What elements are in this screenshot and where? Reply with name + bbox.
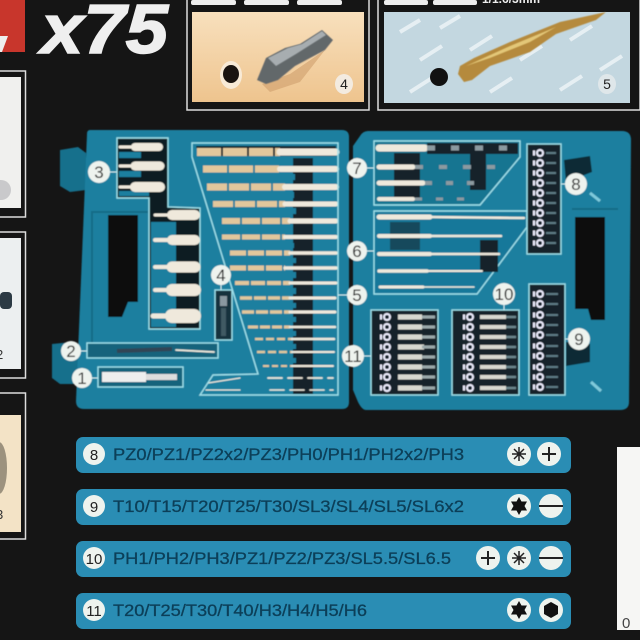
icon: torx (507, 598, 531, 622)
icon: phillips (476, 546, 500, 570)
legend bar 10: PH1/PH2/PH3/PZ1/PZ2/PZ3/SL5.5/SL6.5 (113, 549, 451, 568)
callout 5 (338, 285, 367, 305)
icon: slotted (539, 494, 563, 518)
case left half (52, 130, 349, 409)
legend bar 8 (76, 437, 571, 473)
callout 11 (342, 345, 371, 367)
callout 6: 6 (352, 242, 362, 261)
callout 2: 2 (66, 342, 76, 361)
legend bar 11: T20/T25/T30/T40/H3/H4/H5/H6 (113, 601, 367, 620)
icon: pozidriv (507, 442, 531, 466)
legend bar 8: PZ0/PZ1/PZ2x2/PZ3/PH0/PH1/PH2x2/PH3 (113, 445, 464, 464)
callout 7: 7 (352, 159, 362, 178)
box 9: bit column (529, 284, 565, 395)
callout 9 (565, 328, 590, 350)
panel: left cropped photo 2 (0, 232, 26, 378)
callout 11: 11 (344, 347, 362, 366)
callout 6 (347, 241, 374, 261)
icon: phillips (537, 442, 561, 466)
box 6: masonry drills (374, 211, 527, 294)
box 11: bit block (371, 310, 438, 395)
legend bar 9: T10/T15/T20/T25/T30/SL3/SL4/SL5/SL6x2 (113, 497, 464, 516)
panel: left cropped photo 1 (0, 71, 26, 217)
panel: gold drill photo 5: 5 (603, 76, 611, 92)
callout 4 (211, 265, 231, 290)
panel: right cropped white card (617, 447, 640, 632)
legend bar 10: 10 (86, 551, 102, 568)
box 4: countersinks (215, 290, 232, 340)
red logo fragment (0, 0, 25, 52)
legend bar 9 (76, 489, 571, 525)
legend bar 11: 11 (86, 603, 102, 620)
box 1: magnetic holder (98, 367, 183, 387)
box 8: bit column (527, 144, 561, 254)
callout 3: 3 (94, 163, 104, 182)
callout 8 (561, 173, 587, 195)
callout 1 (72, 368, 98, 388)
callout 7 (347, 158, 374, 178)
panel: open bit case (52, 130, 631, 410)
panel: left cropped photo 3 (0, 393, 26, 539)
callout 4: 4 (216, 266, 226, 285)
legend bar 10 (76, 541, 571, 577)
box 3: hex nut setters (117, 138, 200, 329)
callout 10 (493, 283, 515, 310)
panel: gold drill photo 5 (378, 0, 640, 110)
icon: hex (539, 598, 563, 622)
panel: right cropped white card: 0 (622, 615, 630, 632)
panel: countersink photo 4: 4 (340, 76, 348, 92)
box 5: gold drill bits (192, 143, 338, 395)
legend bar 9: 9 (90, 499, 98, 516)
icon: slotted (539, 546, 563, 570)
callout 3 (88, 161, 117, 183)
box 7: twist drills (374, 141, 520, 205)
callout 2 (61, 341, 87, 361)
callout 1: 1 (77, 369, 87, 388)
box 10: bit block (452, 310, 519, 395)
icon: torx (507, 494, 531, 518)
callout 5: 5 (352, 286, 362, 305)
icon: pozidriv (507, 546, 531, 570)
legend bar 8: 8 (90, 447, 98, 464)
callout 8: 8 (571, 175, 581, 194)
callout 9: 9 (574, 330, 584, 349)
case right half (353, 131, 631, 410)
panel: countersink photo 4 (187, 0, 369, 110)
legend bar 11 (76, 593, 571, 629)
callout 10: 10 (495, 285, 513, 304)
box 2: long bit (87, 343, 218, 358)
